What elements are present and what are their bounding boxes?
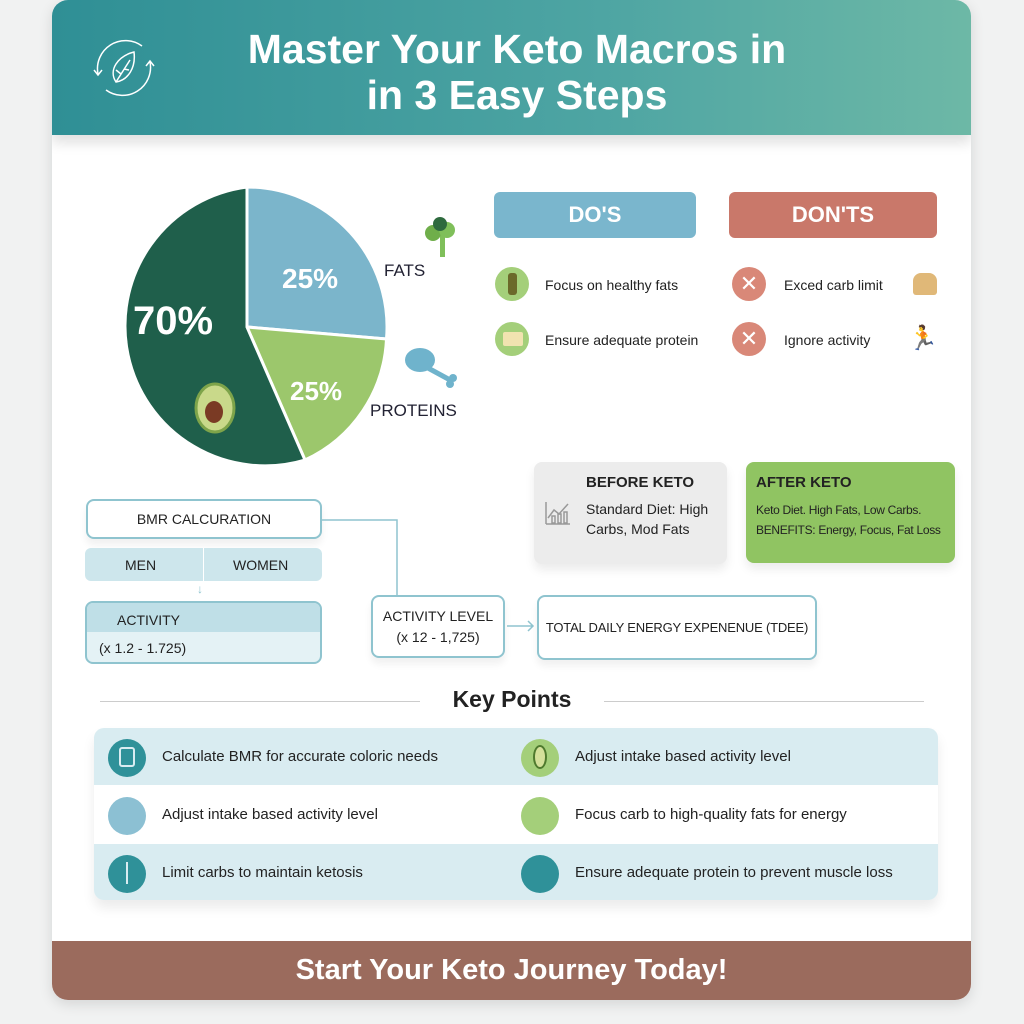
flow: men/women: MEN [125,557,156,573]
flow: activity level: ACTIVITY LEVEL [383,608,493,624]
key point 2 [108,797,378,835]
before keto card: Carbs, Mod Fats [586,521,689,537]
dont item 1 [732,267,937,301]
icon: broccoli [425,217,455,257]
key point 6 [521,855,893,893]
before keto card: Standard Diet: High [586,501,708,517]
do item 2 [495,322,698,356]
arrow down: ↓ [197,582,203,596]
dont item 1: Exced carb limit [784,277,883,293]
title: in 3 Easy Steps [367,72,667,118]
dont item 1: ✕ [740,271,758,296]
after keto card: AFTER KETO [756,474,852,491]
arrow [507,620,534,632]
before keto card: BEFORE KETO [586,474,694,491]
key point 3: Limit carbs to maintain ketosis [162,864,363,881]
key point 2: Adjust intake based activity level [162,806,378,823]
after keto card: Keto Diet. High Fats, Low Carbs. [756,503,921,517]
icon: chicken leg [405,348,457,388]
panel: don'ts [729,192,937,238]
panel: do's: DO'S [569,202,621,227]
pie chart: 25% [282,263,338,294]
dont item 2: ✕ [740,326,758,351]
do item 1: Focus on healthy fats [545,277,678,293]
after keto card: BENEFITS: Energy, Focus, Fat Loss [756,523,941,537]
key point 4 [521,739,791,777]
flow: men/women: WOMEN [233,557,288,573]
do item 2: Ensure adequate protein [545,332,698,348]
panel: don'ts: DON'TS [792,202,874,227]
pie chart: FATS [384,261,425,280]
footer banner [52,941,971,1000]
header banner [52,0,971,135]
pie chart [126,188,457,464]
title [248,26,786,118]
flow: TDEE: TOTAL DAILY ENERGY EXPENENUE (TDEE) [546,620,808,635]
dont item 2 [732,322,938,356]
flow: activity: ACTIVITY [117,612,180,628]
arrow connector [322,519,398,595]
flow: activity level [371,595,505,658]
dont item 2: 🏃 [908,325,938,352]
flow: men/women [85,548,322,581]
title: Master Your Keto Macros in [248,26,786,72]
key point 4: Adjust intake based activity level [575,748,791,765]
pie chart: PROTEINS [370,401,457,420]
footer banner: Start Your Keto Journey Today! [296,954,727,986]
flow: activity [85,601,322,664]
flow: TDEE [537,595,817,660]
panel: do's [494,192,696,238]
key point 1 [108,739,438,777]
key point 1: Calculate BMR for accurate coloric needs [162,748,438,765]
key point 5: Focus carb to high-quality fats for energy [575,806,847,823]
icon: leaf cycle [94,40,154,96]
key point 3 [108,855,363,893]
after keto card [746,462,955,563]
flow: activity: (x 1.2 - 1.725) [99,640,186,656]
dont item 2: Ignore activity [784,332,870,348]
pie chart: 70% [133,299,213,343]
flow: BMR calculation [86,499,322,539]
key points heading: Key Points [453,686,571,712]
icon: avocado [196,384,234,432]
flow: BMR calculation: BMR CALCURATION [137,511,271,527]
flow: activity level: (x 12 - 1,725) [396,628,480,644]
pie chart: 25% [290,376,342,406]
before keto card [534,462,727,564]
key point 5 [521,797,847,835]
key points panel [94,728,938,900]
do item 1 [495,267,678,301]
key point 6: Ensure adequate protein to prevent muscle loss [575,864,893,881]
